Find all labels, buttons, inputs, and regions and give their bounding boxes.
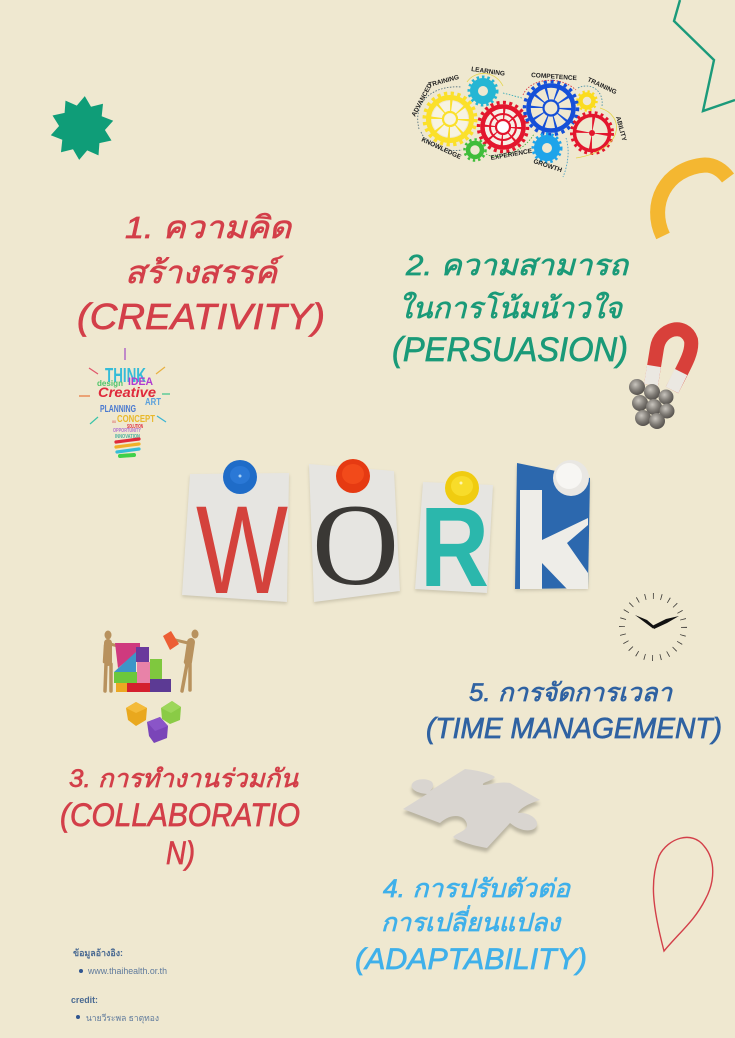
heading 2: persuasion: 2. ความสามารถ [405,250,630,282]
icon: lightbulb word cloud [79,348,170,456]
cyan gear [469,77,497,105]
loose cubes [126,701,181,743]
heading 3: collaboration [60,765,300,871]
bulb words: INNOVATION [115,434,140,440]
red gear [478,102,528,152]
references text: นายวีระพล ธาตุทอง [86,1013,159,1024]
gear labels: TRAINING [586,76,618,96]
pin red [336,459,370,493]
letter W: W [196,481,288,620]
green gear [464,140,486,160]
letter W [182,473,289,620]
light blue gear [533,134,561,162]
gear labels: GROWTH [532,158,563,174]
bulb rays [79,348,170,424]
heading 4: adaptability: การเปลี่ยนแปลง [381,905,562,937]
bulb words: PLANNING [100,404,136,415]
heading 4: adaptability: (ADAPTABILITY) [355,943,587,976]
heading 3: collaboration: (COLLABORATIO [60,797,300,833]
bulb words: Creative [98,384,156,400]
pin yellow [445,471,479,505]
gear labels: TRAINING [428,74,460,89]
gear labels: COMPETENCE [531,72,578,82]
bulb words: GO [112,419,116,424]
pin white [553,460,589,496]
heading 2: persuasion: (PERSUASION) [392,331,628,369]
heading 1: creativity: 1. ความคิด [125,210,293,245]
bulb words: CONCEPT [117,414,155,425]
magnet body [651,329,691,390]
letter K [515,463,590,589]
heading 2: persuasion: ในการโน้มน้าวใจ [398,291,624,325]
illustration: gears [411,66,628,177]
icon: clock [622,596,684,658]
decoration: red drop outline [653,837,713,951]
icon: green star [51,96,113,160]
gear connecting dotted lines [418,73,616,177]
bulb words: SOLUTION [127,424,143,430]
decoration: yellow arc [658,165,728,236]
bulb words [97,365,161,440]
paper shadow [182,465,590,604]
big yellow gear [424,94,476,144]
clock hands [635,615,679,629]
heading 1: creativity: สร้างสรรค์ [125,255,283,290]
gear labels: EXPERIENCE [490,148,533,162]
heading 3: collaboration: 3. การทำงานร่วมกัน [69,765,299,793]
bulb words: ART [145,397,161,408]
references text [71,948,167,1024]
bulb words: IDEA [128,376,153,388]
small yellow gear [578,92,596,110]
references text: ข้อมูลอ้างอิง: [73,948,123,959]
decoration: green zigzag line [674,0,735,111]
references text: www.thaihealth.or.th [87,966,167,976]
bulb words: OPPORTUNITY [113,428,142,434]
illustration: mannequins and blocks [104,630,198,743]
letter O: O [312,481,399,610]
blue gear [524,82,578,134]
gear labels: ABILITY [614,116,628,143]
gear labels: KNOWLEDGE [420,136,463,161]
icon: puzzle piece [403,769,540,852]
heading 1: creativity: (CREATIVITY) [77,296,325,337]
heading 5: time management: 5. การจัดการเวลา [469,679,673,707]
left mannequin [104,630,134,691]
red gear right [572,112,612,154]
bulb words: THINK [105,365,146,387]
gear labels: ADVANCED [411,82,434,118]
references text: credit: [71,995,98,1005]
gear labels: LEARNING [471,66,505,78]
heading 5: time management [426,679,722,745]
letter R: R [420,484,489,610]
right mannequin [171,630,198,691]
bulb words: design [97,379,123,388]
gear labels [411,66,628,174]
icon: magnet with balls [629,329,691,429]
bulb base [116,439,139,456]
block stack [114,631,179,692]
heading 2: persuasion [392,250,630,369]
heading 4: adaptability [355,875,587,976]
heading 1: creativity [77,210,325,337]
steel balls [629,379,674,429]
heading 5: time management: (TIME MANAGEMENT) [426,713,722,745]
magnet tips [651,366,681,390]
heading 4: adaptability: 4. การปรับตัวต่อ [383,875,571,903]
heading 3: collaboration: N) [166,835,195,871]
pin blue [223,460,257,494]
WORK letters [182,459,590,620]
